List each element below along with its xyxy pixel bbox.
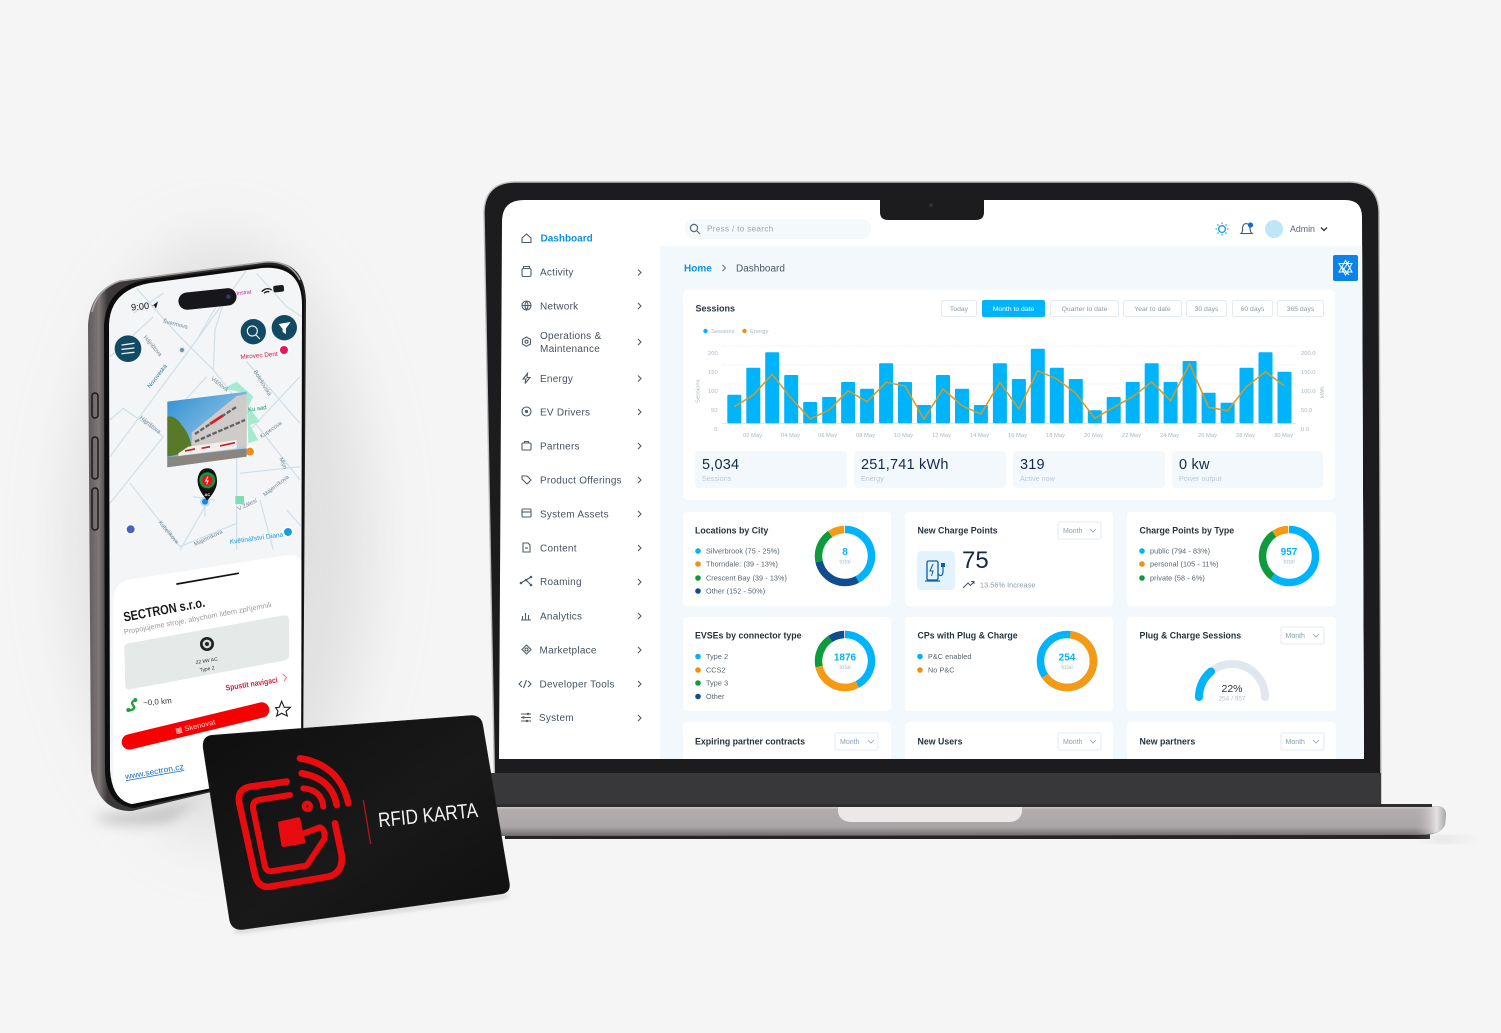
card divider	[363, 800, 371, 844]
sessions and energy chart: 02 May	[743, 433, 762, 439]
card: EVSEs by connector type: EVSEs by connector type	[695, 630, 802, 640]
stat: power output	[1172, 451, 1323, 488]
sessions and energy chart: 200.0	[1301, 351, 1316, 357]
card: locations by city: Locations by City	[695, 526, 768, 536]
stat: energy: 251,741 kWh	[861, 457, 949, 473]
RFID card	[203, 716, 510, 933]
sessions and energy chart	[696, 346, 1326, 439]
card: CPs with plug and charge: No P&C	[928, 666, 955, 674]
stat: active now: 319	[1020, 457, 1045, 473]
chart legend: Sessions	[711, 329, 735, 335]
connector panel: 22 kW AC	[195, 657, 219, 666]
nav: EV drivers: EV Drivers	[540, 408, 590, 418]
date range buttons: 365 days	[1287, 306, 1315, 313]
sessions and energy chart: 14 May	[970, 433, 989, 439]
date range buttons	[942, 300, 1324, 317]
sessions and energy chart: Sessions	[696, 379, 702, 403]
camera notch	[880, 199, 984, 220]
sessions and energy chart: 0.0	[1301, 427, 1309, 433]
stat: power output: 0 kw	[1179, 457, 1210, 473]
website link: www.sectron.cz	[123, 762, 184, 781]
card: plug and charge sessions	[1127, 617, 1336, 711]
sessions and energy chart: 150	[708, 370, 718, 376]
charger pin: AC	[204, 492, 210, 497]
phone bezel	[104, 265, 304, 808]
chart legend: Energy	[750, 329, 768, 335]
map labels: Hájrištova	[142, 335, 163, 359]
sessions and energy chart: 10 May	[894, 433, 913, 439]
map roads: Ku sad	[248, 405, 267, 414]
card: EVSEs by connector type: CCS2	[706, 666, 726, 674]
sessions and energy chart: 16 May	[1008, 433, 1027, 439]
sessions heading: Sessions	[696, 304, 735, 314]
nav: system assets	[522, 509, 641, 520]
nav: developer tools	[519, 680, 641, 690]
nav: partners: Partners	[540, 442, 580, 452]
header icons and admin: Admin	[1290, 224, 1315, 234]
date range buttons: 30 days	[1195, 306, 1219, 313]
card: new partners	[1127, 722, 1336, 772]
charger pin	[198, 468, 217, 507]
soft shadow behind phone	[70, 240, 370, 840]
sessions and energy chart: 18 May	[1046, 433, 1065, 439]
card: CPs with plug and charge: total	[1061, 665, 1073, 671]
connector panel: Type 2	[199, 665, 215, 674]
card label: RFID KARTA	[377, 799, 479, 832]
scan button	[129, 710, 262, 742]
dynamic island	[178, 287, 237, 311]
card: new users: New Users	[918, 736, 963, 746]
top status bar: 9:00	[130, 301, 150, 313]
card: new users	[905, 722, 1113, 772]
sessions and energy chart: 24 May	[1160, 433, 1179, 439]
card: new charge points: 13.56% Increase	[980, 580, 1035, 590]
card: EVSEs by connector type: Type 2	[706, 652, 728, 661]
nav: system	[521, 713, 641, 724]
panel: sessions	[683, 290, 1335, 500]
station detail sheet	[113, 555, 303, 807]
card: expiring partner contracts	[683, 722, 891, 772]
laptop screen	[495, 198, 1370, 772]
map labels: Majerníkova	[263, 474, 291, 498]
sessions and energy chart: 26 May	[1198, 433, 1217, 439]
nav: content	[522, 542, 642, 552]
card: charge points by type: personal (105 - 11%)	[1150, 560, 1219, 568]
sessions and energy chart: kWh	[1320, 386, 1326, 398]
sessions and energy chart: 100.0	[1301, 389, 1316, 395]
card: charge points by type: Charge Points by Type	[1140, 526, 1234, 536]
card: EVSEs by connector type: Other	[706, 692, 725, 701]
stat: sessions: 5,034	[702, 457, 739, 473]
stat: active now	[1013, 451, 1165, 488]
card: EVSEs by connector type: Type 3	[706, 678, 728, 688]
nav: marketplace: Marketplace	[540, 646, 597, 656]
card: locations by city: Silverbrook (75 - 25%)	[706, 546, 780, 556]
nav: analytics	[521, 612, 642, 622]
search field: Press / to search	[707, 224, 774, 234]
phone ground shadow	[92, 800, 200, 825]
card: EVSEs by connector type: 1876	[834, 652, 857, 664]
stat: active now: Active now	[1020, 474, 1056, 483]
map park	[223, 382, 260, 443]
location photo	[167, 392, 247, 467]
card: charge points by type: public (794 - 83%)	[1150, 546, 1210, 556]
nav: EV drivers	[522, 406, 642, 416]
card: CPs with plug and charge: P&C enabled	[928, 652, 971, 661]
sheet background	[113, 555, 303, 807]
sessions and energy chart: 150.0	[1301, 370, 1316, 376]
map labels: V Zálesí	[237, 498, 259, 512]
icon: charging station	[917, 551, 955, 590]
nav: energy	[523, 374, 641, 385]
stat: sessions	[695, 451, 847, 488]
distance: ~0,0 km	[143, 696, 172, 708]
top status bar	[130, 285, 284, 313]
card: locations by city: 8	[842, 547, 848, 558]
nav: roaming	[520, 576, 641, 588]
date range buttons: Year to date	[1134, 306, 1171, 313]
date range buttons: Quarter to date	[1062, 306, 1108, 313]
sessions and energy chart: 30 May	[1274, 433, 1293, 439]
card: locations by city	[683, 512, 891, 606]
favourite star	[276, 701, 290, 716]
card: locations by city: Thorndale: (39 - 13%)	[706, 560, 778, 568]
card: new partners: New partners	[1140, 736, 1195, 746]
date range buttons: Today	[950, 306, 969, 313]
sessions and energy chart: 12 May	[932, 433, 951, 439]
nav: operations and maintenance: Maintenance	[540, 344, 600, 355]
side buttons	[92, 393, 98, 530]
map labels: Višňová	[209, 376, 230, 394]
card: charge points by type: 957	[1281, 547, 1298, 558]
breadcrumb	[684, 264, 784, 272]
map labels: Kubelíkova	[157, 520, 180, 546]
card shadow	[233, 895, 510, 933]
phone top edge highlight	[92, 262, 300, 312]
card: locations by city: total	[839, 560, 851, 566]
card: CPs with plug and charge: CPs with Plug & Charge	[918, 630, 1018, 640]
nav: content: Content	[540, 544, 577, 554]
card body	[203, 716, 509, 929]
phone	[88, 255, 310, 825]
nav: operations and maintenance: Operations &	[540, 331, 601, 342]
header icons and admin	[1216, 220, 1327, 238]
card: locations by city: Crescent Bay (39 - 13%)	[706, 574, 787, 582]
navigation link: Spustit navigaci	[225, 675, 278, 693]
nav: marketplace	[522, 645, 641, 656]
breadcrumb: Dashboard	[736, 264, 785, 274]
card: new charge points	[905, 512, 1113, 606]
card: expiring partner contracts: Expiring partner contracts	[695, 736, 805, 746]
nav: energy: Energy	[540, 374, 573, 385]
sessions and energy chart: 50.0	[1301, 408, 1312, 414]
card: charge points by type	[1127, 512, 1336, 606]
phone screen	[100, 255, 310, 815]
nav: system assets: System Assets	[540, 510, 609, 520]
card: CPs with plug and charge	[905, 617, 1113, 711]
sheet handle	[177, 573, 238, 584]
map roads	[110, 270, 302, 550]
sessions and energy chart: 50	[711, 408, 717, 414]
card: expiring partner contracts: Month	[840, 739, 860, 746]
sessions and energy chart: 0	[714, 427, 717, 433]
sessions and energy chart: 04 May	[781, 433, 800, 439]
card: new charge points: Month	[1063, 528, 1083, 535]
card: new partners: Month	[1286, 739, 1305, 746]
distance	[126, 696, 172, 712]
nav: product offerings: Product Offerings	[540, 476, 622, 486]
card: EVSEs by connector type: total	[839, 665, 851, 671]
card: charge points by type: private (58 - 6%)	[1150, 574, 1205, 582]
sessions and energy chart: 06 May	[818, 433, 837, 439]
blue settings button	[1333, 255, 1358, 281]
product scene	[62, 181, 1455, 934]
map labels: Hájrištova	[138, 415, 162, 436]
scan button: ▦ Skenovat	[174, 717, 216, 735]
laptop lid	[484, 182, 1381, 808]
date range buttons: 60 days	[1241, 306, 1265, 313]
sessions and energy chart: 08 May	[856, 433, 875, 439]
laptop base	[497, 804, 1480, 842]
gauge: 254 / 957	[1218, 696, 1246, 702]
nav: partners	[521, 441, 642, 450]
card: new users: Month	[1063, 739, 1083, 746]
nav: network: Network	[540, 302, 579, 312]
card: plug and charge sessions: Month	[1286, 633, 1305, 640]
sessions and energy chart: 28 May	[1236, 433, 1255, 439]
card: EVSEs by connector type	[683, 617, 891, 711]
nav: operations and maintenance	[522, 332, 642, 352]
connector panel	[124, 615, 289, 689]
map labels: Majerníkova	[193, 529, 225, 548]
nav: product offerings	[522, 476, 641, 486]
map labels	[138, 318, 291, 548]
map labels: Novoveská	[147, 363, 169, 390]
top status bar: Instrat	[236, 289, 252, 297]
sessions and energy chart: 22 May	[1122, 433, 1141, 439]
nav: system: System	[539, 713, 574, 724]
map labels: Bolešovská	[252, 370, 272, 398]
RFID chip mark	[280, 819, 303, 845]
nav: activity: Activity	[540, 268, 574, 278]
card: locations by city: Other (152 - 50%)	[706, 586, 765, 596]
card: charge points by type: total	[1283, 560, 1295, 566]
lid lower bezel	[491, 773, 1381, 808]
map labels: Mlýn	[277, 457, 287, 470]
RFID logo	[239, 758, 348, 887]
nav: analytics: Analytics	[540, 612, 582, 622]
card: plug and charge sessions: Plug & Charge Sessions	[1140, 630, 1241, 640]
sidebar navigation	[519, 234, 641, 724]
date range buttons: Month to date	[993, 306, 1034, 313]
map labels: Švermova	[162, 318, 189, 331]
map roads: Mirovec Dent	[240, 351, 278, 361]
sessions and energy chart: 20 May	[1084, 433, 1103, 439]
card: new charge points: New Charge Points	[918, 526, 998, 536]
nav: roaming: Roaming	[540, 577, 582, 588]
main content background	[660, 246, 1366, 762]
laptop	[484, 182, 1480, 842]
card: CPs with plug and charge: 254	[1059, 652, 1076, 664]
stat: energy	[854, 451, 1006, 488]
sessions and energy chart: 100	[708, 389, 718, 395]
stat: energy: Energy	[861, 474, 884, 483]
map labels: Kupecova	[259, 420, 284, 440]
sessions and energy chart: 200	[708, 351, 718, 357]
gauge: 22%	[1221, 683, 1243, 695]
map buttons	[115, 315, 297, 362]
breadcrumb: Home	[684, 264, 712, 274]
nav: dashboard: Dashboard	[540, 234, 593, 244]
stat: sessions: Sessions	[702, 474, 732, 483]
nav: network	[522, 301, 641, 312]
card: new charge points: 75	[962, 547, 989, 574]
search field	[685, 219, 871, 239]
gauge	[1199, 664, 1265, 702]
station name: SECTRON s.r.o.	[122, 595, 206, 625]
map roads: Květinářství Diana	[229, 531, 284, 546]
stat: power output: Power output	[1179, 474, 1221, 483]
nav: activity	[522, 266, 641, 278]
nav: developer tools: Developer Tools	[540, 680, 615, 690]
station description: Propojujeme stroje, abychom lidem zpříjemnili	[123, 600, 273, 636]
map markers	[278, 344, 290, 356]
phone body	[88, 262, 306, 811]
chart legend	[703, 328, 768, 334]
